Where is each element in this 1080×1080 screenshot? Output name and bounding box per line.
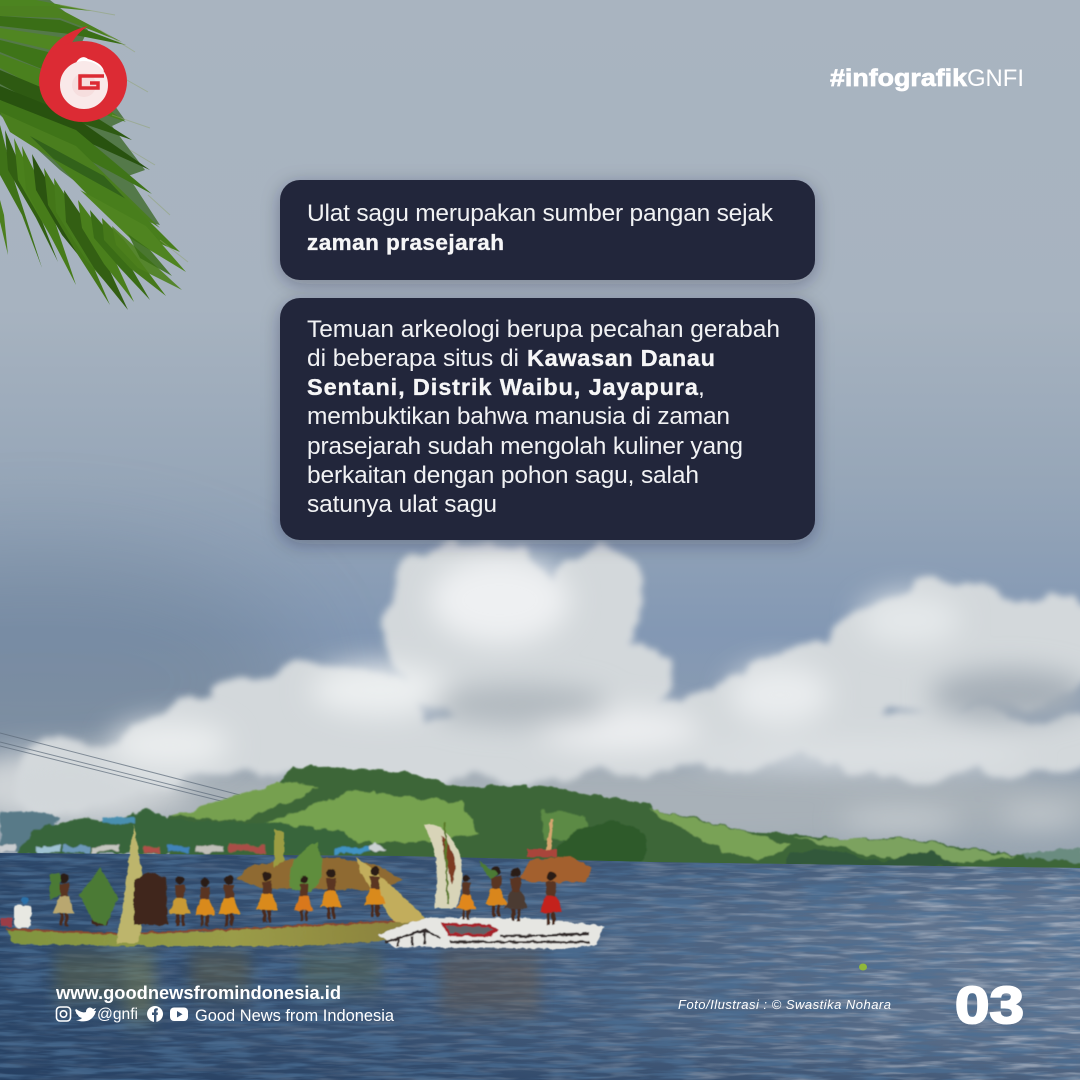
card 2 text: membuktikan bahwa manusia di zaman — [307, 403, 730, 430]
footer: website and social handles: @gnfi — [97, 1006, 138, 1023]
palm fronds on boat — [50, 860, 498, 925]
icon: instagram — [56, 1007, 70, 1021]
palm lower blades — [0, 125, 182, 310]
festive boat with dancers — [1, 820, 604, 949]
footer: website and social handles: Good News from Indonesia — [195, 1007, 395, 1025]
dancers — [88, 872, 168, 925]
panel: archaeological finding card — [280, 298, 815, 540]
card 1 text — [307, 200, 774, 255]
background: hills and far shore — [0, 766, 1080, 875]
background: cumulus clouds — [0, 548, 1080, 847]
footer: website and social handles — [55, 982, 395, 1025]
boat reflection — [55, 950, 540, 1020]
icon: facebook — [147, 1006, 163, 1022]
card 2 text: satunya ulat sagu — [307, 491, 497, 518]
card 2 text: berkaitan dengan pohon sagu, salah — [307, 462, 699, 489]
card 2 text: di beberapa situs di — [307, 345, 519, 372]
power lines — [0, 733, 240, 802]
card 2 text: prasejarah sudah mengolah kuliner yang — [307, 433, 743, 460]
icon: youtube — [170, 1008, 188, 1021]
footer: website and social handles: www.goodnewsfromindonesia.id — [55, 982, 341, 1003]
card 2 text — [307, 316, 780, 518]
card 1 text: Ulat sagu merupakan sumber pangan sejak — [307, 200, 774, 227]
panel: zaman prasejarah card — [280, 180, 815, 280]
background canoe crowd — [237, 820, 592, 892]
small buoy on water — [859, 964, 867, 970]
palm thin tips — [60, 5, 188, 262]
green canoe hull — [6, 921, 420, 946]
boat driver — [1, 896, 31, 928]
palm upper blades — [0, 0, 186, 272]
card 2 text: Sentani, Distrik Waibu, Jayapura — [307, 374, 699, 400]
speedboat — [378, 917, 604, 949]
logo: GNFI red emblem — [39, 26, 127, 122]
card 1 text: zaman prasejarah — [307, 230, 504, 255]
hashtag: #infografik — [830, 65, 968, 92]
logo emblem — [66, 57, 104, 103]
island trees — [554, 822, 648, 866]
hashtag — [830, 65, 1024, 92]
totem figure — [425, 824, 462, 908]
palm base mass — [0, 0, 160, 225]
page number: 03 — [955, 977, 1024, 1035]
waterfront buildings — [0, 817, 385, 854]
background: lake water — [0, 850, 1080, 1080]
photo credit: Foto/Ilustrasi : © Swastika Nohara — [678, 997, 891, 1012]
card 2 text: , — [698, 374, 705, 401]
card 2 text: Kawasan Danau — [527, 345, 715, 371]
palm frond top-left — [0, 0, 188, 310]
card 2 text: Temuan arkeologi berupa pecahan gerabah — [307, 316, 780, 343]
treeline left — [17, 810, 380, 854]
hashtag: GNFI — [967, 65, 1024, 92]
icon: twitter — [75, 1008, 96, 1021]
